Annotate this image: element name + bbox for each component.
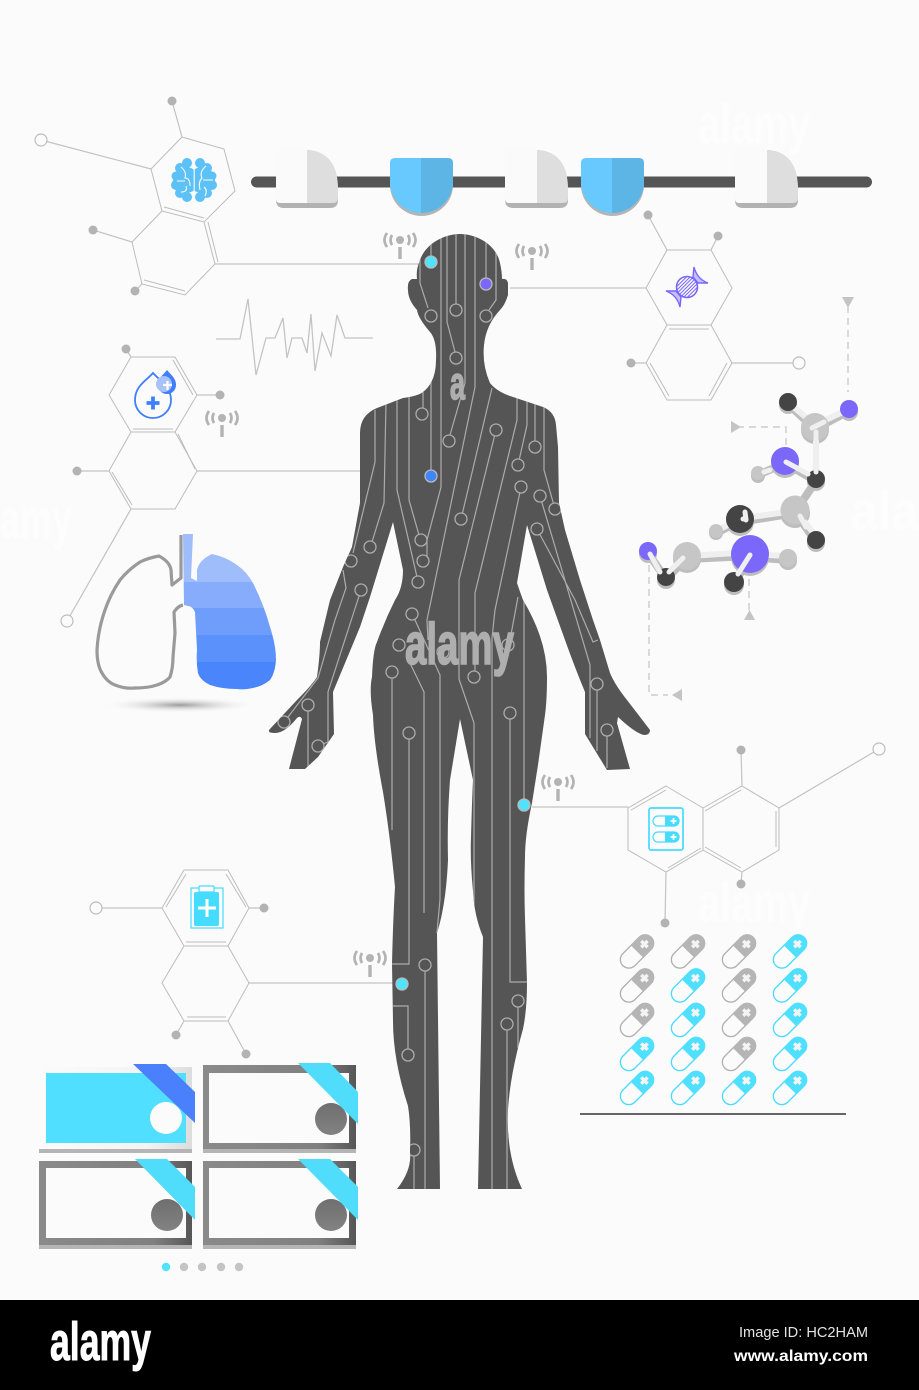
- pagination dots: [162, 1263, 243, 1271]
- faint stock watermarks: amy: [0, 487, 72, 550]
- right lung banded fill: [183, 534, 276, 690]
- hexagon cluster: DNA: [510, 210, 805, 400]
- wireless signal icons: [206, 233, 574, 977]
- footer logo: alamy: [50, 1312, 151, 1372]
- icon: pill box: [649, 808, 683, 850]
- dashed leader lines: [649, 297, 854, 701]
- lungs: [97, 530, 280, 713]
- faint stock watermarks: alamy: [698, 92, 810, 155]
- card 2: [203, 1063, 358, 1153]
- slider knob 1: [276, 150, 338, 208]
- hexagon cluster: brain: [35, 96, 420, 296]
- atoms: [639, 393, 858, 592]
- top slider bar: [251, 150, 872, 216]
- slider knob 2: [505, 150, 568, 208]
- watermark on body: alamy: [405, 612, 514, 677]
- icon: DNA helix: [666, 267, 708, 307]
- image id: Image ID: HC2HAM: [739, 1324, 868, 1341]
- faint stock watermarks: [0, 92, 919, 934]
- bond highlights over atoms: [650, 422, 824, 574]
- faint stock watermarks: alamy: [698, 871, 810, 934]
- circuit nodes: [278, 304, 613, 1156]
- watermark on body: [405, 357, 514, 677]
- icon: blood drops: [135, 370, 176, 418]
- card 4: [203, 1159, 358, 1249]
- slider knob 3: [735, 150, 798, 208]
- molecule model: [639, 297, 858, 701]
- bond undersides: [648, 404, 849, 584]
- watermark on body: a: [450, 357, 465, 409]
- footer url: www.alamy.com: [733, 1348, 868, 1365]
- slider shield 1: [390, 158, 453, 216]
- card 1: selected: [39, 1064, 195, 1153]
- circuit traces: [278, 234, 613, 1189]
- card grid: [39, 1063, 358, 1271]
- slider shield 2: [581, 158, 644, 216]
- hexagon cluster: clipboard: [90, 870, 400, 1058]
- left lung outline: [97, 535, 183, 688]
- card 3: [39, 1159, 195, 1249]
- hexagon cluster: pills: [532, 743, 885, 928]
- ECG heartbeat line: [216, 299, 373, 375]
- sensor dots: [396, 256, 530, 990]
- icon: clipboard: [191, 886, 223, 928]
- lung shadow: [102, 697, 258, 713]
- bonds behind atoms: [690, 404, 849, 556]
- atom shadows: [639, 396, 858, 595]
- icon: brain: [171, 158, 217, 202]
- pill chart: [580, 930, 846, 1115]
- hexagon cluster: blood drop: [61, 344, 360, 627]
- footer band: [0, 1300, 919, 1390]
- body silhouette with circuit traces: [269, 234, 650, 1189]
